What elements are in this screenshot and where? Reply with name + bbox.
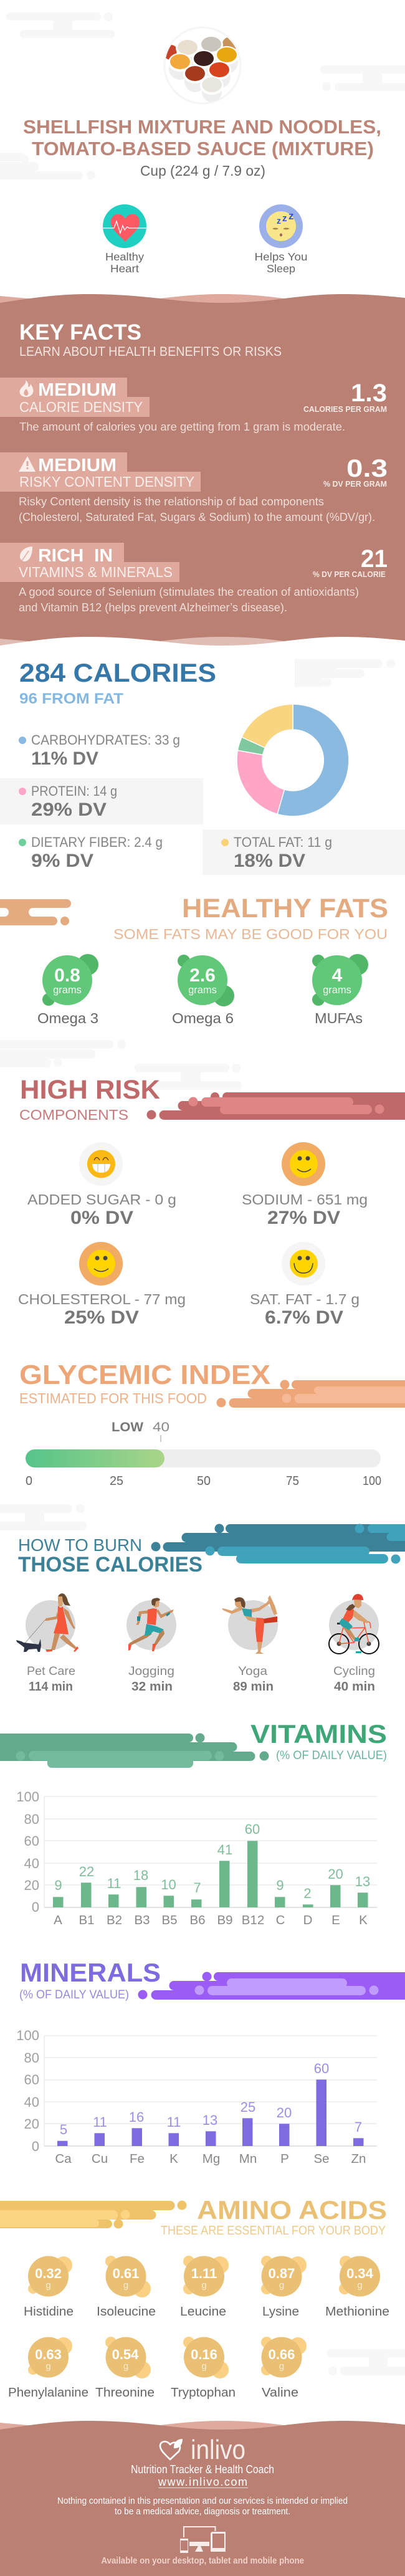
bar chart: vitamins: B1	[79, 1913, 95, 1927]
item: added sugar	[27, 1142, 176, 1228]
bar chart: vitamins: K	[359, 1913, 368, 1927]
bar chart: vitamins: 0	[32, 1899, 39, 1915]
item: cholesterol: CHOLESTEROL - 77 mg	[18, 1291, 186, 1307]
label: jogging: 32 min	[131, 1680, 173, 1694]
legend: total fat: 18% DV	[234, 851, 305, 871]
disclaimer: Nothing contained in this presentation and our services is intended or implied	[57, 2496, 348, 2506]
bar chart: minerals: 60	[314, 2061, 329, 2076]
badge: methionine: Methionine	[325, 2305, 389, 2319]
bar chart: minerals: 25	[241, 2099, 255, 2115]
bar chart: minerals: 11	[167, 2114, 181, 2130]
badge: lysine	[261, 2256, 307, 2319]
panel: minerals	[16, 1958, 405, 2166]
badge: valine: g	[279, 2361, 284, 2372]
item: cholesterol: 25% DV	[64, 1307, 139, 1328]
availability note: Available on your desktop, tablet and mobile phone	[101, 2555, 304, 2566]
label: yoga	[233, 1664, 274, 1694]
badge: tryptophan: 0.16	[191, 2347, 217, 2362]
fact: risky content density: MEDIUM	[38, 456, 117, 475]
heading: those calories: THOSE CALORIES	[18, 1553, 202, 1577]
item: sodium	[242, 1142, 368, 1228]
bar chart: vitamins: B3	[134, 1913, 150, 1927]
badge: leucine	[180, 2256, 229, 2319]
gauge: glycemic value	[26, 1420, 381, 1488]
legend: carbohydrates	[19, 732, 180, 769]
bar chart: minerals: 80	[24, 2050, 39, 2066]
heading: vitamins: VITAMINS	[250, 1719, 387, 1748]
panel: amino acids	[0, 2195, 405, 2400]
badge: phenylalanine: 0.63	[35, 2347, 62, 2362]
title	[23, 116, 381, 160]
panel: footer	[0, 2421, 405, 2576]
activity: cycling	[329, 1594, 379, 1654]
bar chart: minerals: 40	[24, 2094, 39, 2110]
fact: calorie density: MEDIUM	[38, 380, 117, 400]
decorative blob: glycemic index	[217, 1380, 405, 1408]
bar chart: vitamins: 22	[79, 1864, 94, 1879]
icon: sleep: z	[288, 210, 294, 222]
bar chart: minerals: K	[169, 2152, 178, 2166]
bar chart: minerals: Se	[313, 2152, 330, 2166]
panel: how to burn those calories	[16, 1524, 405, 1694]
tagline: Nutrition Tracker & Health Coach	[131, 2463, 274, 2476]
fact: calorie density: CALORIE DENSITY	[19, 399, 143, 415]
badge: phenylalanine: Phenylalanine	[8, 2386, 88, 2400]
legend: dietary fiber	[19, 834, 163, 871]
item: saturated fat	[250, 1242, 360, 1328]
bar chart: minerals: Mn	[239, 2152, 257, 2166]
legend: protein: PROTEIN: 14 g	[31, 783, 117, 799]
fact: rich in vitamins and minerals: RICH IN	[38, 546, 113, 566]
gauge: glycemic value: 50	[197, 1474, 211, 1488]
donut chart: macronutrients	[237, 704, 349, 816]
bar chart: vitamins: 100	[16, 1789, 39, 1805]
label: helps you sleep	[254, 250, 308, 275]
badge: histidine: g	[45, 2280, 51, 2291]
badge: threonine	[95, 2337, 155, 2400]
item: added sugar: 0% DV	[70, 1208, 133, 1228]
fact: rich in vitamins and minerals: 21	[361, 545, 388, 573]
icon: sleep: z	[277, 216, 281, 226]
label: yoga: Yoga	[238, 1664, 267, 1678]
fact: calorie density: The amount of calories you are getting from 1 gram is moderate.	[19, 421, 345, 433]
legend: total fat	[202, 829, 405, 875]
website link: www.inlivo.com	[158, 2476, 247, 2488]
bar chart: minerals: 11	[93, 2114, 107, 2130]
bar chart: vitamins: 60	[24, 1833, 39, 1849]
badge: omega 3	[37, 954, 98, 1026]
label: healthy heart: Healthy	[105, 250, 144, 263]
fact: calorie density	[0, 378, 387, 433]
badge: omega 3: Omega 3	[37, 1010, 98, 1026]
badge: MUFAs: 4	[332, 965, 343, 986]
bar chart: vitamins: B12	[242, 1913, 264, 1927]
heading: how to burn: HOW TO BURN	[18, 1535, 142, 1555]
bar chart: minerals: Zn	[351, 2152, 366, 2166]
fact: rich in vitamins and minerals: VITAMINS & MINERALS	[19, 564, 173, 580]
gauge: glycemic value: 0	[26, 1474, 32, 1488]
badge: omega 6: Omega 6	[172, 1010, 234, 1026]
legend: total fat: TOTAL FAT: 11 g	[234, 834, 332, 850]
bar chart: vitamins: B5	[161, 1913, 178, 1927]
background clouds: header	[0, 12, 405, 179]
bar chart: minerals: 100	[16, 2028, 39, 2043]
heading: amino acids: AMINO ACIDS	[197, 2195, 387, 2225]
item: saturated fat: SAT. FAT - 1.7 g	[250, 1291, 360, 1307]
panel: vitamins	[0, 1719, 387, 1927]
bar chart: minerals: 20	[24, 2116, 39, 2132]
fact: rich in vitamins and minerals: % DV PER CALORIE	[313, 570, 386, 579]
gauge: glycemic value: 40	[153, 1420, 169, 1434]
heading: minerals: MINERALS	[20, 1958, 161, 1987]
badge: threonine: g	[123, 2361, 128, 2372]
subheading: healthy fats: SOME FATS MAY BE GOOD FOR YOU	[113, 926, 388, 942]
badge: leucine: g	[201, 2280, 207, 2291]
decorative blob: amino acids	[0, 2201, 187, 2228]
bar chart: minerals: 0	[32, 2139, 39, 2154]
heading: glycemic index: GLYCEMIC INDEX	[19, 1360, 270, 1390]
label: yoga: 89 min	[233, 1680, 274, 1694]
badge: valine: Valine	[262, 2386, 298, 2400]
label: helps you sleep: Helps You	[254, 250, 308, 263]
gauge: glycemic value: 100	[363, 1474, 381, 1488]
activity: jogging	[126, 1598, 176, 1651]
fact: risky content density: % DV PER GRAM	[323, 479, 387, 489]
legend: carbohydrates: CARBOHYDRATES: 33 g	[31, 732, 180, 748]
title: TOMATO-BASED SAUCE (MIXTURE)	[32, 138, 374, 160]
icon: healthy heart	[103, 204, 146, 248]
bar chart: vitamins: 80	[24, 1811, 39, 1827]
title: SHELLFISH MIXTURE AND NOODLES,	[23, 116, 381, 138]
label: pet care: Pet Care	[27, 1664, 75, 1678]
bar chart: minerals: Ca	[55, 2152, 72, 2166]
subheading: minerals: (% OF DAILY VALUE)	[19, 1988, 129, 2001]
fact: risky content density: (Cholesterol, Saturated Fat, Sugars & Sodium) to the amount (%DV/gr).	[19, 511, 375, 523]
bar chart: vitamins: C	[276, 1913, 285, 1927]
subheading: 96 from fat: 96 FROM FAT	[19, 690, 123, 707]
badge: methionine: g	[357, 2280, 363, 2291]
bar chart: vitamins: D	[303, 1913, 312, 1927]
bar chart: minerals: P	[280, 2152, 289, 2166]
disclaimer	[57, 2496, 348, 2517]
gauge: glycemic value: 75	[286, 1474, 299, 1488]
panel: calories	[0, 658, 405, 875]
subheading: vitamins: (% OF DAILY VALUE)	[276, 1749, 387, 1762]
badge: lysine: Lysine	[262, 2305, 299, 2319]
bar chart: vitamins: 20	[24, 1877, 39, 1893]
bar chart: vitamins: 9	[276, 1877, 284, 1893]
badge: omega 6	[172, 955, 234, 1026]
badge: valine: 0.66	[269, 2347, 295, 2362]
logo: inlivo: inlivo	[191, 2435, 245, 2465]
panel: high risk	[18, 1075, 405, 1328]
bar chart: minerals: 20	[277, 2105, 292, 2120]
badge: threonine: Threonine	[95, 2386, 155, 2400]
bar chart: minerals: 60	[24, 2072, 39, 2087]
item: added sugar: ADDED SUGAR - 0 g	[27, 1191, 176, 1208]
legend: protein	[0, 778, 203, 824]
item: sodium: 27% DV	[267, 1208, 340, 1228]
disclaimer: to be a medical advice, diagnosis or treatment.	[115, 2507, 290, 2517]
fact: rich in vitamins and minerals: and Vitamin B12 (helps prevent Alzheimer’s disease).	[19, 601, 287, 614]
badge: phenylalanine: g	[45, 2361, 51, 2372]
label: jogging: Jogging	[128, 1664, 174, 1678]
heading: 284 calories: 284 CALORIES	[19, 658, 216, 687]
badge: omega 6: 2.6	[189, 965, 216, 986]
decorative blob: burn calories	[151, 1524, 405, 1564]
badge: leucine: 1.11	[191, 2266, 217, 2281]
badge: isoleucine	[97, 2256, 156, 2319]
legend: dietary fiber: DIETARY FIBER: 2.4 g	[31, 834, 163, 850]
background clouds: high risk	[0, 1040, 242, 1090]
bar chart: minerals: Fe	[130, 2152, 145, 2166]
item: cholesterol	[18, 1242, 186, 1328]
gauge: glycemic value: LOW	[112, 1420, 143, 1434]
fact: calorie density: 1.3	[351, 379, 387, 407]
subheading: components: COMPONENTS	[19, 1107, 128, 1123]
background cloud: burn calories	[0, 1504, 87, 1530]
legend: protein: 29% DV	[31, 799, 107, 820]
badge: phenylalanine	[8, 2337, 88, 2400]
badge: valine	[261, 2337, 307, 2400]
bar chart: minerals: 5	[60, 2122, 67, 2137]
badge: histidine	[24, 2256, 74, 2319]
badge: tryptophan: Tryptophan	[171, 2386, 236, 2400]
bar chart: minerals: 7	[355, 2119, 362, 2135]
badge: MUFAs	[312, 954, 368, 1026]
bar chart: vitamins: E	[331, 1913, 340, 1927]
badge: methionine	[325, 2256, 389, 2319]
label: jogging	[128, 1664, 174, 1694]
fact: risky content density: RISKY CONTENT DENSITY	[19, 474, 194, 490]
label: healthy heart	[105, 250, 144, 275]
bar chart: vitamins: 9	[54, 1877, 62, 1893]
decorative blob: minerals	[138, 1972, 405, 2000]
bar chart: vitamins: B2	[107, 1913, 122, 1927]
bar chart: vitamins: 60	[245, 1821, 260, 1837]
subheading: glycemic index: ESTIMATED FOR THIS FOOD	[19, 1390, 207, 1406]
legend: dietary fiber: 9% DV	[31, 851, 93, 871]
badge: methionine: 0.34	[346, 2266, 374, 2281]
badge: histidine: 0.32	[35, 2266, 62, 2281]
background cloud: calories	[295, 659, 395, 687]
bar chart: minerals: Mg	[202, 2152, 220, 2166]
bar chart: vitamins: A	[54, 1913, 62, 1927]
decorative blob: healthy fats	[0, 899, 91, 925]
badge: histidine: Histidine	[24, 2305, 74, 2319]
logo: inlivo	[160, 2435, 245, 2465]
bar chart: vitamins: 7	[193, 1880, 201, 1896]
activity: pet care	[16, 1593, 79, 1652]
legend: carbohydrates: 11% DV	[31, 748, 98, 769]
heading: key facts: KEY FACTS	[19, 320, 141, 345]
label: helps you sleep: Sleep	[267, 262, 295, 275]
bar chart: vitamins	[16, 1789, 377, 1927]
fact: rich in vitamins and minerals: A good source of Selenium (stimulates the creation of antioxidants)	[19, 586, 359, 598]
label: healthy heart: Heart	[110, 262, 139, 275]
bar chart: vitamins: 18	[133, 1868, 148, 1883]
badge: omega 3: 0.8	[54, 965, 80, 986]
bar chart: vitamins: 13	[355, 1874, 370, 1889]
label: cycling: 40 min	[334, 1680, 375, 1694]
bar chart: vitamins: B6	[189, 1913, 206, 1927]
bar chart: vitamins: 41	[217, 1842, 232, 1858]
panel: key facts	[0, 294, 405, 654]
panel: glycemic index	[19, 1360, 405, 1488]
label: cycling	[333, 1664, 375, 1694]
badge: omega 6: grams	[188, 985, 217, 996]
bar chart: vitamins: B9	[217, 1913, 233, 1927]
background cloud: amino acids	[326, 2349, 405, 2375]
badge: MUFAs: grams	[323, 985, 351, 996]
heading: high risk: HIGH RISK	[20, 1075, 160, 1105]
bar chart: vitamins: 40	[24, 1856, 39, 1871]
bar chart: minerals	[16, 2028, 377, 2166]
bar chart: minerals: Cu	[92, 2152, 108, 2166]
badge: isoleucine: g	[123, 2280, 128, 2291]
decorative blob: high risk	[147, 1092, 405, 1120]
badge: lysine: g	[279, 2280, 284, 2291]
subheading: key facts: LEARN ABOUT HEALTH BENEFITS OR RISKS	[19, 345, 282, 359]
subheading: amino acids: THESE ARE ESSENTIAL FOR YOUR BODY	[161, 2224, 386, 2238]
badge: isoleucine: Isoleucine	[97, 2305, 156, 2319]
fact: risky content density	[0, 452, 388, 523]
fact: calorie density: CALORIES PER GRAM	[303, 404, 387, 414]
fact: risky content density: Risky Content density is the relationship of bad components	[19, 495, 324, 508]
bar chart: vitamins: 20	[328, 1866, 343, 1882]
serving size: Cup (224 g / 7.9 oz)	[140, 163, 265, 179]
heading: healthy fats: HEALTHY FATS	[182, 894, 388, 923]
icon: sleep: z	[282, 213, 287, 224]
badge: tryptophan: g	[201, 2361, 207, 2372]
decorative blob: vitamins	[0, 1734, 269, 1768]
food photo: bowls of sauce	[163, 27, 241, 103]
badge: leucine: Leucine	[180, 2305, 226, 2319]
badge: threonine: 0.54	[112, 2347, 139, 2362]
badge: isoleucine: 0.61	[113, 2266, 139, 2281]
bar chart: vitamins: 11	[107, 1876, 121, 1891]
activity: yoga	[222, 1595, 278, 1654]
badge: lysine: 0.87	[269, 2266, 295, 2281]
bar chart: vitamins: 2	[303, 1886, 312, 1901]
badge: MUFAs: MUFAs	[315, 1010, 363, 1026]
panel: healthy fats	[0, 894, 388, 1026]
bar chart: minerals: 16	[129, 2109, 144, 2125]
fact: rich in vitamins and minerals	[0, 543, 388, 614]
label: cycling: Cycling	[333, 1664, 375, 1678]
badge: omega 3: grams	[53, 985, 82, 996]
label: pet care: 114 min	[29, 1680, 73, 1694]
fact: risky content density: 0.3	[346, 455, 388, 482]
icon: devices	[180, 2526, 226, 2553]
bar chart: minerals: 13	[202, 2112, 217, 2128]
badge: tryptophan	[171, 2337, 236, 2400]
label: pet care	[27, 1664, 75, 1694]
bar chart: vitamins: 10	[161, 1877, 176, 1892]
item: saturated fat: 6.7% DV	[265, 1307, 343, 1328]
gauge: glycemic value: 25	[110, 1474, 123, 1488]
item: sodium: SODIUM - 651 mg	[242, 1191, 368, 1208]
icon: sleep	[259, 204, 303, 248]
